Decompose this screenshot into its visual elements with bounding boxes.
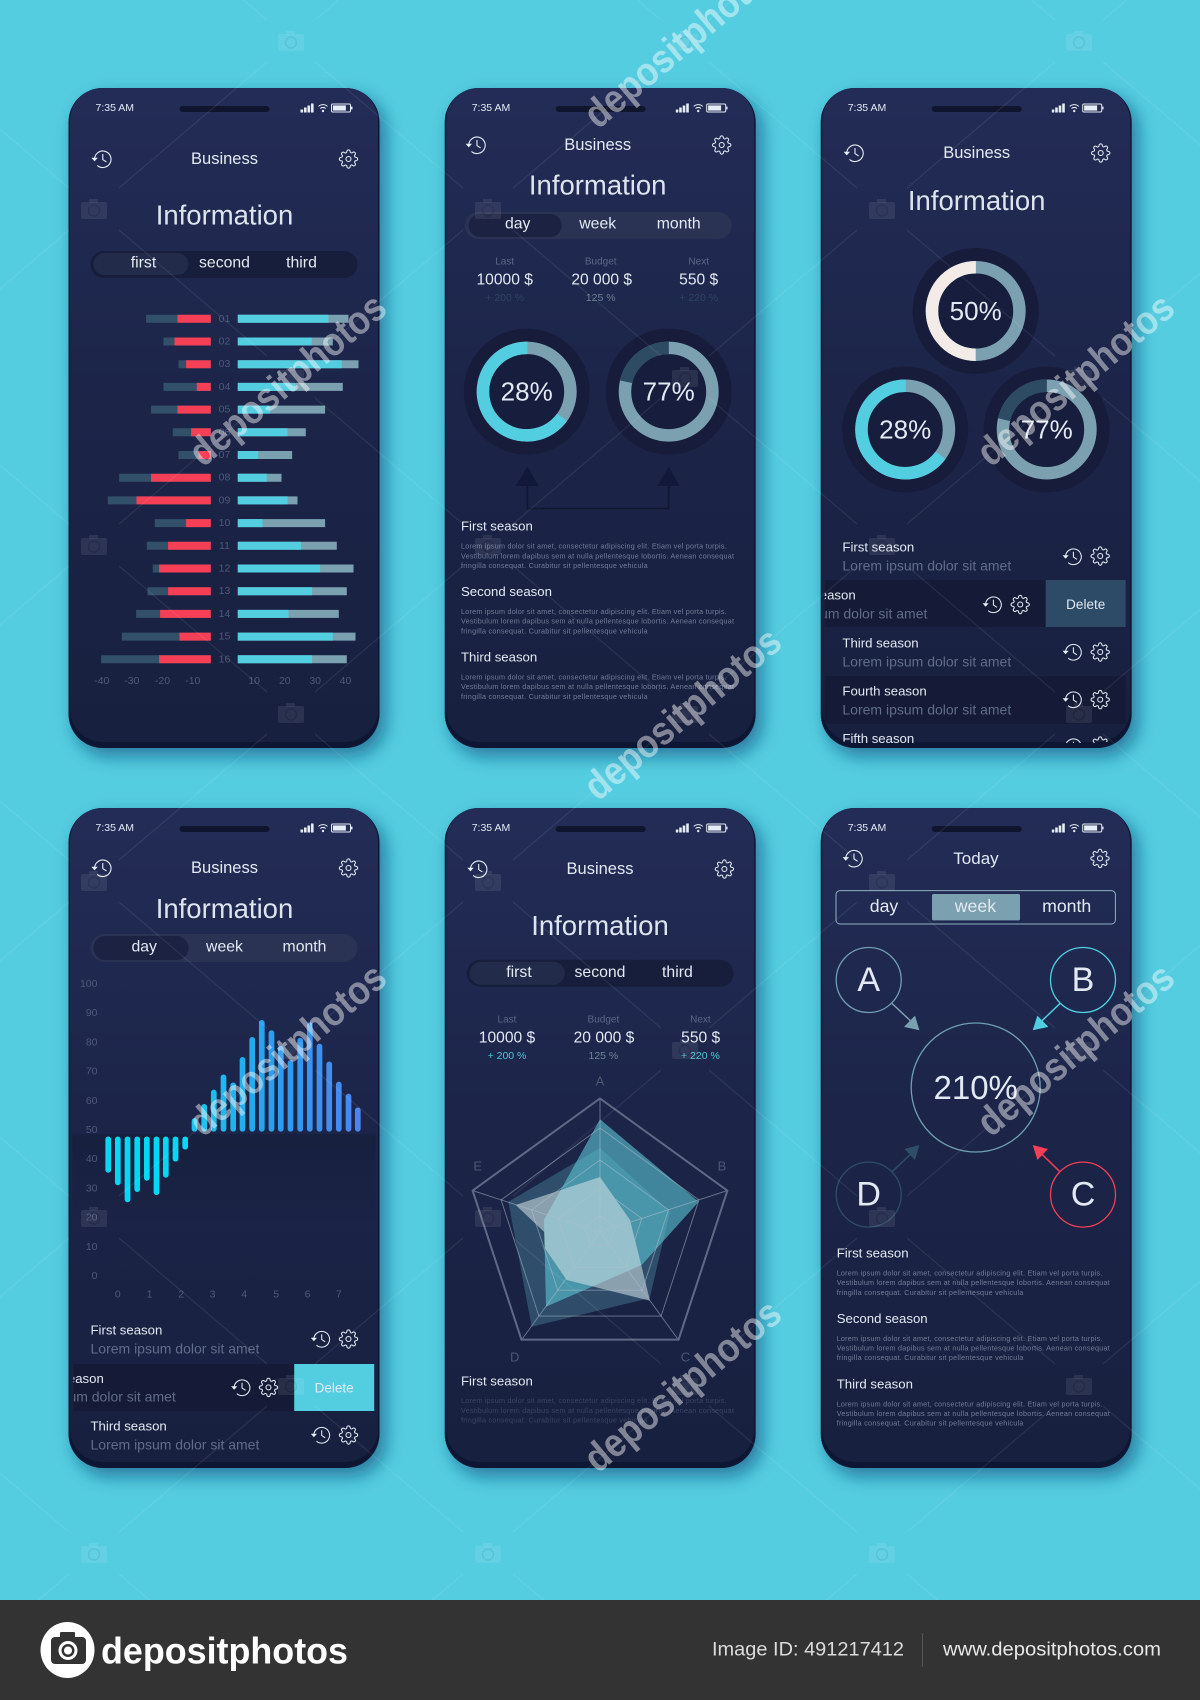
list row: swiped second season — [824, 580, 1046, 627]
row labels: 05 — [219, 404, 230, 416]
icon: settings gear — [339, 150, 358, 168]
status bar — [472, 102, 728, 114]
list row: first season: First season — [842, 540, 914, 554]
x axis labels: 10 — [248, 675, 260, 687]
x axis labels: 30 — [309, 675, 321, 687]
list row: swiped second season: Lorem ipsum dolor sit amet — [759, 606, 928, 622]
text block: second season: fringilla consequat. Curabitur sit pellentesque vehicula — [837, 1353, 1023, 1362]
text block: second season: fringilla consequat. Curabitur sit pellentesque vehicula — [461, 626, 648, 636]
radar axis letters: C — [681, 1350, 690, 1364]
list row: third season — [842, 636, 1109, 670]
phone 3: three donuts and list — [759, 88, 1132, 755]
text block: second season: Lorem ipsum dolor sit amet, consectetur adipiscing elit. Etiam vel porta turpis. — [837, 1334, 1102, 1343]
stat: budget — [571, 256, 632, 304]
stat: budget: 125 % — [589, 1050, 618, 1062]
stat: last: 10000 $ — [477, 272, 533, 288]
stat: budget: 20 000 $ — [574, 1030, 635, 1046]
x axis labels: 0 — [115, 1289, 121, 1301]
row labels: 07 — [219, 449, 230, 461]
y axis labels — [80, 978, 98, 1282]
tab control: day — [505, 216, 531, 232]
list row: swiped second season: Second season — [765, 588, 856, 602]
list row: swiped second season: Second season — [13, 1371, 104, 1386]
node A with arrow — [836, 948, 919, 1030]
text block: second season: Vestibulum lorem dapibus sem at nulla pellentesque lobortis. Aenean consequat — [837, 1344, 1110, 1353]
heading: Information — [529, 170, 666, 200]
list row: fourth season: Lorem ipsum dolor sit amet — [842, 702, 1011, 718]
watermark text group — [181, 0, 1183, 1481]
text block: third season: Lorem ipsum dolor sit amet, consectetur adipiscing elit. Etiam vel porta turpis. — [461, 672, 727, 682]
node C with arrow: C — [1071, 1176, 1095, 1214]
list row: swiped second season: Lorem ipsum dolor sit amet — [7, 1388, 176, 1404]
radar grid — [473, 1098, 727, 1340]
y axis labels: 10 — [86, 1241, 98, 1253]
text block: first season — [461, 1374, 734, 1424]
list row: third season: Lorem ipsum dolor sit amet — [842, 654, 1011, 670]
footer logo text: depositphotos — [101, 1630, 348, 1672]
text block: first season — [461, 518, 734, 570]
x axis labels: -10 — [185, 675, 201, 687]
icon: history — [466, 137, 485, 154]
x axis labels: -30 — [124, 675, 140, 687]
tab control: day — [870, 896, 898, 916]
x axis labels — [115, 1289, 342, 1301]
footer bar — [0, 1600, 1200, 1700]
status bar — [472, 822, 728, 834]
delete button: Delete — [315, 1380, 354, 1396]
stat: budget: 20 000 $ — [571, 272, 632, 288]
phone body — [68, 808, 380, 1468]
status bar — [848, 822, 1104, 834]
app title: Business — [564, 136, 631, 154]
icon: settings gear — [1091, 849, 1109, 868]
text block: first season: Lorem ipsum dolor sit amet, consectetur adipiscing elit. Etiam vel porta turpis. — [837, 1268, 1102, 1278]
donut: 77%: 77% — [1021, 414, 1073, 444]
node A with arrow: A — [857, 961, 880, 999]
image id: Image ID: 491217412 — [712, 1640, 904, 1660]
center circle 210% — [911, 1023, 1040, 1152]
stat: budget — [574, 1014, 635, 1062]
phone body — [68, 88, 380, 748]
app title: Business — [943, 144, 1010, 162]
watermark text group: depositphotos — [181, 285, 395, 475]
stat: last: + 200 % — [485, 292, 524, 304]
status bar — [848, 102, 1104, 114]
icon: settings gear — [715, 860, 734, 878]
x axis labels: 2 — [178, 1289, 184, 1301]
donut: 28%: 28% — [501, 377, 553, 407]
text block: first season: Lorem ipsum dolor sit amet, consectetur adipiscing elit. Etiam vel porta turpis. — [461, 1396, 727, 1405]
phone 5: radar chart — [445, 808, 756, 1468]
text block: third season: Vestibulum lorem dapibus sem at nulla pellentesque lobortis. Aenean consequat — [461, 682, 734, 691]
list row: third season — [90, 1418, 358, 1453]
stat: budget: 125 % — [586, 292, 616, 304]
x axis labels: 5 — [273, 1289, 279, 1301]
row labels: 04 — [219, 381, 230, 393]
tab control: first — [506, 964, 532, 981]
list row: fourth season: Fourth season — [842, 684, 927, 698]
text block: third season: fringilla consequat. Curabitur sit pellentesque vehicula — [461, 692, 648, 701]
heading: Information — [156, 893, 293, 924]
radar chart — [473, 1074, 727, 1364]
radar outer frame — [473, 1098, 727, 1340]
stat: next: + 220 % — [679, 292, 718, 304]
phone body — [445, 808, 756, 1468]
x axis labels — [94, 675, 351, 687]
watermark text group: depositphotos — [576, 619, 790, 809]
heading: Information — [908, 185, 1045, 216]
phone 2: donuts and season text — [445, 88, 756, 748]
row labels: 14 — [219, 608, 230, 620]
tab control — [465, 212, 732, 239]
text block: third season — [461, 650, 734, 701]
phone 1: diverging bar chart screen — [68, 88, 380, 748]
donut: 28% — [464, 329, 590, 455]
tab control: second — [575, 964, 625, 981]
text block: third season: Vestibulum lorem dapibus sem at nulla pellentesque lobortis. Aenean consequat — [837, 1409, 1110, 1418]
phone 4: histogram and list — [7, 808, 380, 1468]
y axis labels: 20 — [86, 1212, 98, 1224]
tab control: third — [286, 254, 317, 272]
node B with arrow: B — [1072, 961, 1094, 999]
radar series: dark — [508, 1148, 670, 1327]
stat: last — [477, 256, 533, 304]
y axis labels: 0 — [92, 1270, 98, 1282]
status bar — [96, 102, 352, 114]
radar series: light — [516, 1177, 650, 1301]
row labels: 16 — [219, 653, 230, 665]
status bar: 7:35 AM — [848, 822, 886, 834]
icon: settings gear — [1092, 144, 1110, 162]
watermark text group: depositphotos — [181, 955, 395, 1145]
tab control: week — [578, 216, 616, 232]
stat: next: Next — [690, 1014, 711, 1026]
connector arrows — [516, 466, 680, 508]
stat: last: Last — [495, 256, 514, 268]
list row: first season — [90, 1322, 358, 1357]
x axis labels: 6 — [305, 1289, 311, 1301]
icon: history — [467, 861, 487, 878]
radar axis letters: E — [473, 1158, 482, 1174]
radar axis letters: D — [510, 1350, 519, 1364]
x axis labels: -20 — [155, 675, 170, 687]
tab control: week — [205, 938, 243, 956]
status bar: 7:35 AM — [96, 102, 134, 114]
node C with arrow — [1033, 1145, 1116, 1227]
row labels: 01 — [219, 313, 230, 325]
phone body — [821, 88, 1132, 748]
y axis labels: 30 — [86, 1182, 98, 1194]
stat: last: + 200 % — [488, 1050, 526, 1062]
status bar: 7:35 AM — [472, 822, 510, 834]
tab control — [90, 934, 358, 962]
list clipped to screen — [824, 542, 1126, 743]
tab control: second — [199, 254, 250, 272]
center circle 210%: 210% — [933, 1069, 1018, 1106]
stat: next: 550 $ — [679, 272, 719, 288]
radar series: teal — [544, 1119, 699, 1307]
delete button — [1046, 580, 1126, 627]
y axis labels: 60 — [86, 1095, 98, 1107]
bars: positive blue — [194, 1023, 358, 1129]
icon: history — [91, 860, 111, 877]
list row: fifth season — [843, 734, 1108, 743]
text block: second season: Vestibulum lorem dapibus sem at nulla pellentesque lobortis. Aenean consequat — [461, 616, 734, 626]
text block: third season: Third season — [837, 1376, 913, 1392]
bar chart: right bars — [238, 315, 358, 663]
text block: first season: First season — [461, 1374, 533, 1388]
node D with arrow — [836, 1145, 919, 1227]
x axis labels: 3 — [210, 1289, 216, 1301]
text block: first season: fringilla consequat. Curabitur sit pellentesque vehicula — [837, 1288, 1023, 1297]
donut: 77% — [984, 366, 1110, 492]
node B with arrow — [1033, 948, 1116, 1030]
list row: first season: First season — [90, 1322, 162, 1338]
y axis labels: 90 — [86, 1007, 98, 1019]
text block: third season: Third season — [461, 650, 537, 664]
text block: first season: First season — [461, 518, 533, 534]
stat: next: + 220 % — [681, 1050, 720, 1062]
text block: first season: Vestibulum lorem dapibus sem at nulla pellentesque lobortis. Aenean consequat — [837, 1278, 1110, 1287]
list row: first season: Lorem ipsum dolor sit amet — [842, 558, 1011, 574]
row labels: 13 — [219, 585, 230, 597]
stat: budget: Budget — [588, 1014, 619, 1026]
icon: history — [844, 145, 863, 162]
text block: second season — [837, 1311, 1110, 1362]
status bar: 7:35 AM — [472, 102, 510, 114]
stat: last: Last — [498, 1014, 517, 1026]
row labels: 10 — [219, 517, 230, 529]
y axis labels: 70 — [86, 1066, 98, 1078]
delete button — [294, 1364, 374, 1411]
stat: next: Next — [688, 256, 709, 268]
text block: third season: Lorem ipsum dolor sit amet, consectetur adipiscing elit. Etiam vel porta turpis. — [837, 1400, 1102, 1408]
row labels: 02 — [219, 336, 230, 348]
text block: first season: First season — [837, 1246, 909, 1260]
phone body — [821, 808, 1132, 1468]
radar axis letters — [473, 1074, 726, 1364]
row labels: 15 — [219, 631, 230, 643]
list row: first season — [842, 540, 1109, 574]
radar axis letters: A — [596, 1074, 605, 1088]
stat: budget: Budget — [585, 256, 617, 268]
row labels: 08 — [219, 472, 230, 484]
status bar: 7:35 AM — [848, 102, 886, 114]
heading: Information — [531, 910, 669, 941]
donut: 28%: 28% — [879, 414, 931, 444]
y axis labels: 80 — [86, 1036, 98, 1048]
watermark text group: depositphotos — [576, 1291, 790, 1481]
icon: history — [91, 151, 111, 168]
tab control — [467, 960, 734, 987]
tab control: month — [283, 938, 326, 956]
status bar: 7:35 AM — [96, 822, 134, 834]
footer logo mark — [40, 1622, 94, 1678]
app title: Business — [191, 859, 258, 877]
donut: 28% — [842, 366, 968, 492]
text block: second season: Second season — [837, 1311, 928, 1326]
phone body — [445, 88, 756, 748]
donut: 77% — [606, 329, 732, 455]
text block: first season — [837, 1246, 1110, 1297]
list row: third season: Lorem ipsum dolor sit amet — [90, 1437, 259, 1453]
status bar — [96, 822, 352, 834]
tab control: month — [1042, 896, 1091, 916]
x axis labels: 4 — [241, 1289, 247, 1301]
tab control: third — [662, 964, 693, 981]
list row: fifth season: Fifth season — [842, 731, 914, 746]
list row: swiped second season — [74, 1364, 294, 1411]
heading: Information — [156, 200, 293, 230]
stat: last — [479, 1014, 536, 1062]
x axis labels: 1 — [147, 1289, 153, 1301]
row labels: 03 — [219, 358, 230, 370]
tab control: day — [131, 938, 157, 956]
delete button: Delete — [1066, 597, 1105, 612]
bars: negative cyan — [108, 1139, 185, 1199]
y axis labels: 50 — [86, 1124, 98, 1136]
stat: next — [679, 256, 719, 304]
text block: first season: Vestibulum lorem dapibus sem at nulla pellentesque lobortis. Aenean consequat — [461, 552, 734, 560]
row labels — [219, 313, 230, 665]
stat: next — [681, 1014, 721, 1062]
text block: second season: Lorem ipsum dolor sit amet, consectetur adipiscing elit. Etiam vel porta turpis. — [461, 607, 727, 616]
text block: first season: fringilla consequat. Curabitur sit pellentesque vehicula — [461, 1416, 648, 1424]
stat: next: 550 $ — [681, 1030, 721, 1046]
phone 6: today flow diagram — [821, 808, 1132, 1468]
app title: Business — [567, 860, 633, 878]
text block: second season: Second season — [461, 584, 552, 599]
text block: first season: fringilla consequat. Curabitur sit pellentesque vehicula — [461, 561, 648, 570]
text block: third season: fringilla consequat. Curabitur sit pellentesque vehicula — [837, 1419, 1023, 1428]
tab control: week — [954, 896, 996, 916]
y axis labels: 100 — [80, 978, 98, 990]
bar chart: left bars — [101, 315, 211, 663]
text block: first season: Vestibulum lorem dapibus sem at nulla pellentesque lobortis. Aenean consequat — [461, 1406, 734, 1415]
tab control: first — [131, 254, 157, 272]
icon: history — [843, 850, 862, 867]
icon: settings gear — [339, 859, 358, 877]
text block: first season: Lorem ipsum dolor sit amet, consectetur adipiscing elit. Etiam vel porta turpis. — [461, 542, 727, 550]
text block: third season — [837, 1376, 1110, 1428]
y axis labels: 40 — [86, 1153, 98, 1165]
x axis labels: 20 — [279, 675, 291, 687]
donut: 77%: 77% — [643, 377, 695, 407]
chart lower band — [72, 1134, 376, 1224]
list row: first season: Lorem ipsum dolor sit amet — [90, 1341, 259, 1357]
text block: second season — [461, 584, 734, 636]
app title: Today — [953, 849, 999, 868]
radar axis letters: B — [718, 1158, 726, 1174]
tab control — [90, 251, 358, 278]
list row: fourth season — [825, 676, 1126, 724]
x axis labels: -40 — [94, 675, 110, 687]
donut: 50%: 50% — [950, 296, 1002, 326]
icon: settings gear — [713, 136, 731, 154]
tab control — [836, 891, 1115, 924]
x axis labels: 7 — [336, 1289, 342, 1301]
x axis labels: 40 — [340, 675, 351, 687]
tab control: month — [657, 216, 701, 232]
donut: 50% — [913, 248, 1039, 374]
stat: last: 10000 $ — [479, 1030, 536, 1046]
row labels: 11 — [219, 540, 230, 552]
app title: Business — [191, 150, 258, 168]
row labels: 12 — [219, 562, 230, 574]
row labels: 09 — [219, 494, 230, 506]
website: www.depositphotos.com — [942, 1640, 1161, 1660]
row labels: 06 — [219, 426, 230, 438]
list row: third season: Third season — [90, 1418, 167, 1434]
list row: third season: Third season — [842, 636, 919, 650]
node D with arrow: D — [856, 1176, 881, 1214]
